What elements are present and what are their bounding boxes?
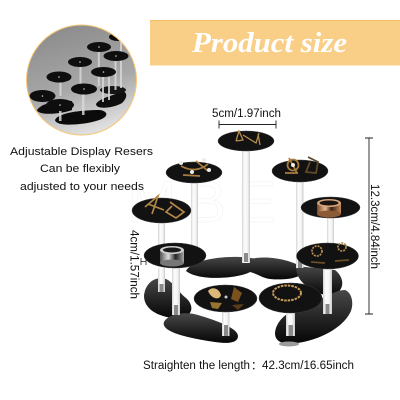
caption: adjustable display risers: adjusted to your needs bbox=[20, 181, 145, 193]
jewelry: leaf earrings bbox=[145, 196, 184, 218]
gold chain ring bbox=[273, 286, 301, 300]
dimension: post height bbox=[128, 230, 146, 299]
dimension: straightened length: 42.3cm/16.65inch bbox=[262, 360, 354, 372]
dimension: straightened length: ： bbox=[251, 360, 262, 372]
acrylic posts bbox=[158, 151, 334, 336]
round shelves bbox=[132, 131, 360, 313]
caption: adjustable display risers bbox=[10, 146, 154, 193]
jewelry: stud earrings bbox=[311, 243, 349, 263]
dimension: total height: 12.3cm/4.84inch bbox=[368, 184, 380, 269]
dimension: shelf diameter bbox=[212, 108, 281, 128]
jewelry: earrings on top shelf bbox=[236, 131, 260, 145]
dimension: post height: 4cm/1.57inch bbox=[128, 230, 140, 299]
copper ring bbox=[317, 199, 341, 218]
caption: adjustable display risers: Adjustable Display Resers bbox=[10, 146, 154, 158]
silver ring bbox=[160, 246, 184, 266]
dimension: total height bbox=[365, 138, 380, 314]
caption: adjustable display risers: Can be flexibly bbox=[40, 163, 121, 175]
banner title: Product size bbox=[191, 28, 347, 59]
watermark: MBE bbox=[128, 170, 276, 235]
photo: adjustable risers in circle bbox=[26, 25, 136, 135]
jewelry: pearl earrings bbox=[179, 158, 211, 176]
jewelry: gold leaf earrings bbox=[208, 287, 244, 310]
jewelry: flower earrings bbox=[285, 157, 318, 173]
rubber foot bbox=[279, 342, 299, 346]
banner bbox=[150, 20, 400, 66]
post screws bbox=[160, 253, 330, 336]
dimension: straightened length bbox=[143, 360, 354, 372]
stand bases bbox=[144, 257, 352, 344]
dimension: shelf diameter: 5cm/1.97inch bbox=[212, 108, 281, 120]
dimension: straightened length: Straighten the length bbox=[143, 360, 250, 372]
product: display stand bbox=[132, 131, 360, 346]
